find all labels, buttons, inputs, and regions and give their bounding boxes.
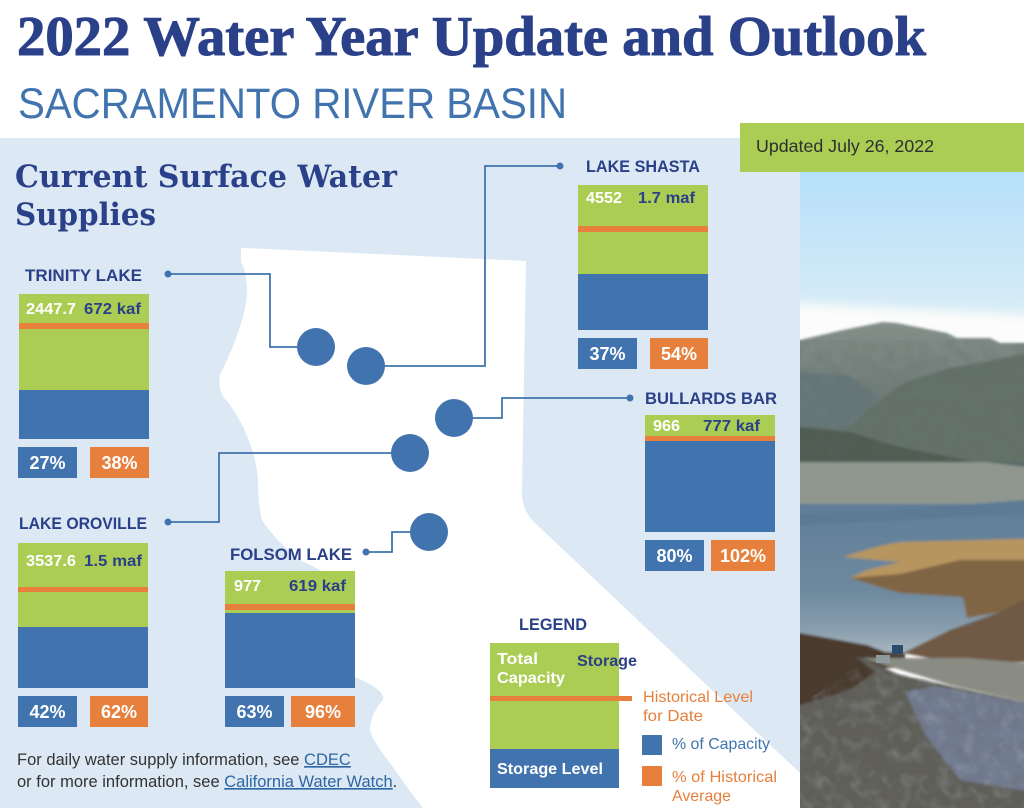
panel: Bullards Bar [645,389,777,571]
map marker: Oroville [391,434,429,472]
panel: Lake Oroville: 3537.6 [26,553,76,570]
panel: Lake Shasta: LAKE SHASTA [586,157,700,176]
section heading [15,159,398,233]
panel: Bullards Bar: BULLARDS BAR [645,389,777,408]
map: California outline [219,248,800,808]
legend [490,615,777,805]
panel: Folsom Lake: 96% [305,702,341,722]
legend: Historical Level [643,689,753,706]
panel: Lake Shasta: 54% [661,344,697,364]
footnote: further information: or for more information, see California Water Watch. [17,773,397,791]
section heading: Supplies [15,197,156,233]
legend: Average [672,788,731,805]
connector: Folsom Lake [362,532,415,556]
panel: Bullards Bar: 102% [720,546,766,566]
panel: Lake Shasta: 4552 [586,190,622,207]
legend: Storage [577,653,637,670]
legend: Capacity [497,670,565,687]
connector: Lake Shasta [380,162,564,366]
panel: Bullards Bar: 966 [653,418,680,435]
connector: Lake Oroville [164,453,395,526]
panel: Bullards Bar: 777 kaf [703,418,761,435]
panel: Trinity Lake [18,266,149,478]
panel: Folsom Lake [225,545,355,727]
panel: Folsom Lake: 977 [234,578,261,595]
panel: Lake Oroville [18,514,148,727]
section heading: Current Surface Water [15,159,398,195]
map marker: Folsom [410,513,448,551]
map marker: Bullards Bar [435,399,473,437]
panel: Lake Oroville: 1.5 maf [84,553,143,570]
panel: Lake Shasta: 1.7 maf [638,190,696,207]
panel: Trinity Lake: 38% [101,453,138,473]
legend: LEGEND [519,615,587,634]
panel: Folsom Lake: FOLSOM LAKE [230,545,352,564]
panel: Bullards Bar: 80% [656,546,693,566]
panel: Lake Oroville: LAKE OROVILLE [19,514,147,533]
panel: update date [740,123,1024,172]
footnote: further information: For daily water supply information, see CDEC [17,751,351,769]
panel: Trinity Lake: 672 kaf [84,301,142,318]
legend: Storage Level [497,761,603,778]
map marker: Trinity [297,328,335,366]
legend: Total [497,651,538,668]
legend: % of Capacity [672,736,770,753]
map marker: Shasta [347,347,385,385]
subtitle: SACRAMENTO RIVER BASIN [18,80,567,128]
legend: for Date [643,708,703,725]
panel: light blue background [0,138,800,808]
panel: Trinity Lake: TRINITY LAKE [25,266,142,285]
legend: % of Historical [672,769,777,786]
panel: Folsom Lake: 619 kaf [289,578,347,595]
panel: Lake Oroville: 42% [29,702,66,722]
connector: Trinity Lake [164,270,300,347]
panel: Lake Oroville: 62% [101,702,137,722]
panel: Trinity Lake: 2447.7 [26,301,76,318]
panel: Folsom Lake: 63% [236,702,273,722]
panel: update date: Updated July 26, 2022 [756,136,934,156]
panel: Lake Shasta [578,157,708,369]
panel: Trinity Lake: 27% [29,453,66,473]
connector: Bullards Bar [470,394,634,418]
photo: reservoir with low water level [800,172,1024,808]
title: 2022 Water Year Update and Outlook [17,6,927,68]
footnote: further information [17,751,397,791]
panel: Lake Shasta: 37% [589,344,626,364]
